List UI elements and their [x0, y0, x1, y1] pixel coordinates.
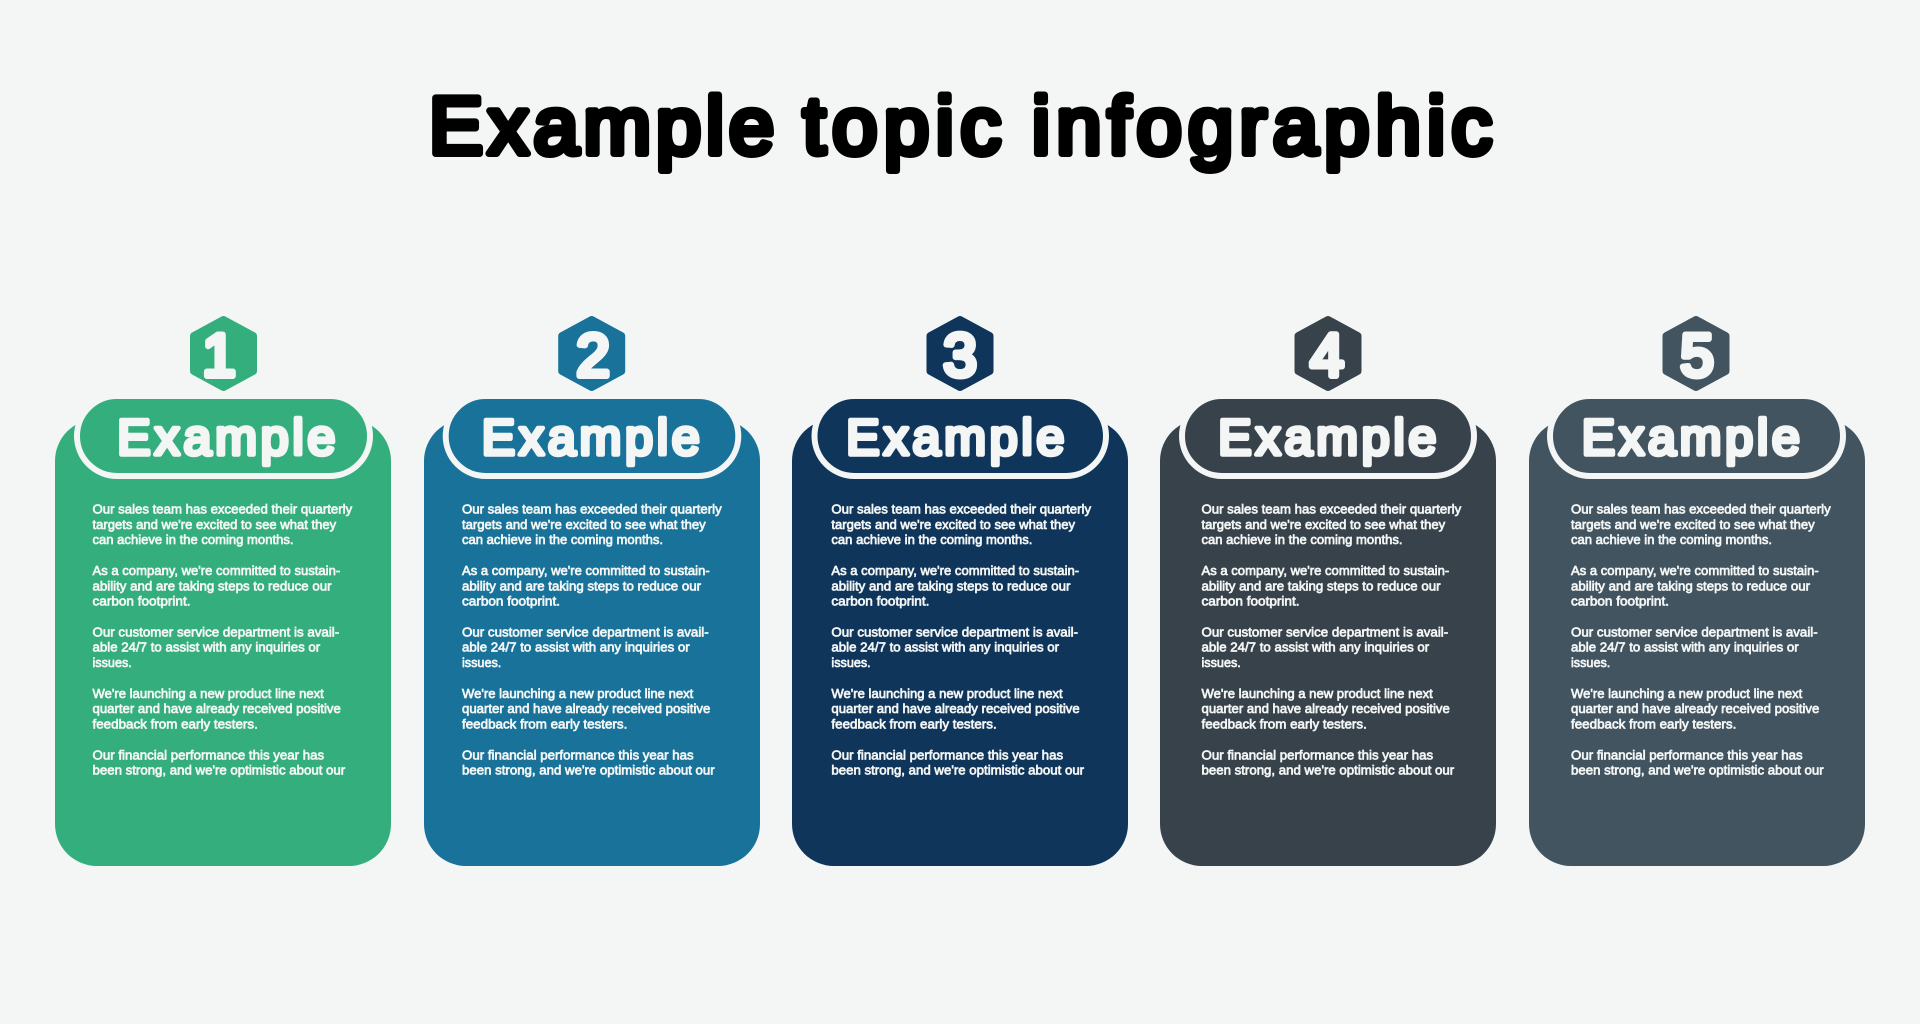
- card body: [792, 419, 1128, 866]
- text block: As a company, we're committed to sustain-: [462, 563, 710, 578]
- heading pill: [1182, 396, 1474, 476]
- icon: hexagon number 2: 2: [576, 322, 610, 389]
- panel: column 1: [55, 320, 391, 866]
- card body: [1529, 419, 1865, 866]
- text block: Our customer service department is avail-: [831, 624, 1078, 639]
- text block: been strong, and we're optimistic about our: [831, 763, 1085, 778]
- text block: feedback from early testers.: [1571, 716, 1736, 732]
- text block: As a company, we're committed to sustain-: [1202, 563, 1449, 578]
- text block: been strong, and we're optimistic about our: [462, 763, 715, 778]
- heading pill: Example: [846, 410, 1064, 466]
- heading pill: Example: [1582, 410, 1800, 466]
- text block: Our customer service department is avail-: [92, 624, 339, 639]
- text block: can achieve in the coming months.: [462, 532, 663, 547]
- text block: can achieve in the coming months.: [1202, 532, 1402, 547]
- text block: We're launching a new product line next: [1202, 686, 1433, 701]
- text block: As a company, we're committed to sustain-: [831, 563, 1079, 578]
- heading pill: Example: [482, 410, 700, 466]
- text block: been strong, and we're optimistic about our: [92, 763, 346, 778]
- text block: We're launching a new product line next: [462, 686, 694, 701]
- text block: We're launching a new product line next: [92, 686, 324, 701]
- text block: quarter and have already received positive: [831, 701, 1080, 716]
- icon: hexagon number 1: 1: [202, 322, 236, 389]
- text block: Our sales team has exceeded their quarterly: [1202, 502, 1462, 516]
- text block: [92, 502, 353, 778]
- icon: hexagon number 4: [1298, 320, 1358, 389]
- text block: can achieve in the coming months.: [92, 532, 294, 547]
- text block: Our financial performance this year has: [1571, 747, 1803, 762]
- text block: targets and we're excited to see what they: [1202, 517, 1446, 532]
- text block: feedback from early testers.: [92, 716, 258, 732]
- text block: ability and are taking steps to reduce our: [92, 578, 332, 593]
- text block: been strong, and we're optimistic about our: [1202, 763, 1455, 778]
- icon: hexagon number 3: [930, 320, 990, 389]
- text block: able 24/7 to assist with any inquiries or: [1202, 640, 1430, 655]
- text block: Our financial performance this year has: [462, 747, 694, 762]
- text block: feedback from early testers.: [831, 716, 997, 732]
- text block: As a company, we're committed to sustain-: [92, 563, 340, 578]
- text block: As a company, we're committed to sustain-: [1571, 563, 1819, 578]
- card body: [55, 419, 391, 866]
- text block: can achieve in the coming months.: [831, 532, 1032, 547]
- text block: quarter and have already received positive: [1202, 701, 1450, 716]
- text block: ability and are taking steps to reduce our: [1202, 578, 1441, 593]
- text block: issues.: [462, 655, 501, 670]
- text block: [1571, 502, 1831, 778]
- text block: feedback from early testers.: [462, 716, 627, 732]
- panel: column 3: [792, 320, 1128, 866]
- text block: Our financial performance this year has: [1202, 747, 1434, 762]
- text block: [1202, 502, 1462, 778]
- heading pill: [446, 396, 738, 476]
- text block: carbon footprint.: [462, 594, 560, 609]
- text block: been strong, and we're optimistic about our: [1571, 763, 1824, 778]
- text block: Our sales team has exceeded their quarterly: [92, 502, 353, 516]
- heading pill: Example: [117, 410, 335, 466]
- text block: Our customer service department is avail-: [1571, 624, 1818, 639]
- text block: carbon footprint.: [1571, 594, 1669, 609]
- heading pill: [77, 396, 370, 476]
- text block: targets and we're excited to see what they: [1571, 517, 1815, 532]
- text block: quarter and have already received positive: [92, 701, 341, 716]
- panel: column 5: [1529, 320, 1865, 866]
- text block: targets and we're excited to see what they: [462, 517, 706, 532]
- text block: Our sales team has exceeded their quarterly: [831, 502, 1092, 516]
- text block: issues.: [1202, 655, 1241, 670]
- icon: hexagon number 1: [194, 320, 253, 389]
- text block: We're launching a new product line next: [831, 686, 1063, 701]
- text block: ability and are taking steps to reduce our: [831, 578, 1071, 593]
- text block: feedback from early testers.: [1202, 716, 1367, 732]
- icon: hexagon number 5: 5: [1680, 322, 1714, 389]
- panel: column 4: [1160, 320, 1496, 866]
- text block: issues.: [92, 655, 132, 670]
- title: topic: [803, 82, 1001, 172]
- heading pill: [1550, 396, 1843, 476]
- title: [429, 82, 1492, 172]
- icon: hexagon number 4: 4: [1310, 322, 1344, 389]
- heading pill: Example: [1218, 410, 1436, 466]
- title: infographic: [1032, 82, 1492, 172]
- icon: hexagon number 2: [562, 320, 621, 389]
- icon: hexagon number 3: 3: [943, 322, 977, 389]
- text block: issues.: [1571, 655, 1610, 670]
- text block: ability and are taking steps to reduce our: [1571, 578, 1811, 593]
- heading pill: [814, 396, 1106, 476]
- text block: [831, 502, 1092, 778]
- card body: [1160, 419, 1496, 866]
- text block: quarter and have already received positive: [1571, 701, 1819, 716]
- text block: targets and we're excited to see what they: [831, 517, 1076, 532]
- text block: Our customer service department is avail-: [462, 624, 709, 639]
- text block: [462, 502, 722, 778]
- text block: able 24/7 to assist with any inquiries or: [831, 640, 1060, 655]
- text block: carbon footprint.: [831, 594, 929, 609]
- text block: issues.: [831, 655, 871, 670]
- card body: [424, 419, 760, 866]
- text block: Our sales team has exceeded their quarterly: [1571, 502, 1831, 516]
- text block: Our customer service department is avail-: [1202, 624, 1448, 639]
- text block: quarter and have already received positive: [462, 701, 710, 716]
- text block: can achieve in the coming months.: [1571, 532, 1772, 547]
- text block: carbon footprint.: [1202, 594, 1300, 609]
- text block: ability and are taking steps to reduce our: [462, 578, 702, 593]
- text block: able 24/7 to assist with any inquiries or: [92, 640, 321, 655]
- title: Example: [429, 82, 774, 172]
- text block: Our financial performance this year has: [831, 747, 1064, 762]
- text block: Our financial performance this year has: [92, 747, 325, 762]
- text block: Our sales team has exceeded their quarterly: [462, 502, 722, 516]
- text block: We're launching a new product line next: [1571, 686, 1803, 701]
- text block: targets and we're excited to see what they: [92, 517, 337, 532]
- icon: hexagon number 5: [1666, 320, 1726, 389]
- text block: carbon footprint.: [92, 594, 190, 609]
- text block: able 24/7 to assist with any inquiries or: [1571, 640, 1799, 655]
- text block: able 24/7 to assist with any inquiries or: [462, 640, 690, 655]
- panel: column 2: [424, 320, 760, 866]
